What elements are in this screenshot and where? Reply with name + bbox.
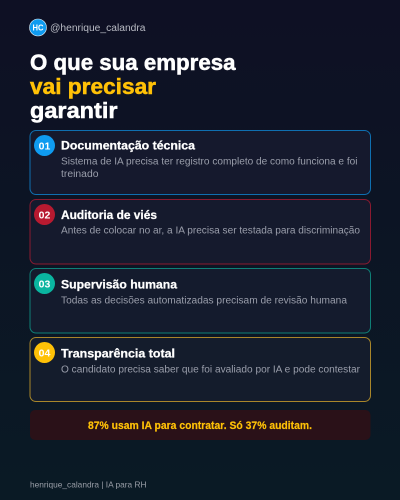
description: transparência total: O candidato precisa saber que foi avaliado por IA e pode contestar — [61, 364, 361, 376]
header: author handle — [30, 19, 146, 36]
heading: transparência total: Transparência total — [61, 347, 175, 361]
title: O que sua empresa — [30, 50, 236, 75]
description: documentação técnica — [61, 156, 358, 180]
footer: henrique_calandra | IA para RH — [30, 480, 146, 490]
panel: 03 supervisão humana — [30, 268, 370, 333]
description: supervisão humana: Todas as decisões automatizadas precisam de revisão humana — [61, 295, 348, 306]
callout: statistic banner — [30, 410, 370, 440]
badge 02: 02 — [39, 209, 50, 221]
badge 02 — [34, 204, 55, 225]
panel: 01 documentação técnica — [30, 130, 370, 194]
badge 01: 01 — [39, 140, 50, 152]
badge 01 — [34, 135, 55, 156]
badge 04 — [34, 342, 55, 363]
description: auditoria de viés: Antes de colocar no ar, a IA precisa ser testada para discriminação — [61, 226, 361, 236]
badge 04: 04 — [39, 347, 50, 359]
title: vai precisar — [30, 74, 156, 99]
heading: documentação técnica: Documentação técnica — [61, 139, 195, 153]
icon: avatar: HC — [32, 24, 44, 32]
heading: auditoria de viés: Auditoria de viés — [61, 208, 157, 222]
panel: 04 transparência total — [30, 338, 370, 402]
description: documentação técnica: Sistema de IA precisa ter registro completo de como funciona e foi — [61, 156, 358, 167]
title: garantir — [30, 98, 118, 123]
handle text: @henrique_calandra — [50, 23, 146, 34]
badge 03: 03 — [39, 278, 50, 290]
badge 03 — [34, 273, 55, 294]
title — [30, 50, 236, 123]
callout: statistic banner: 87% usam IA para contratar. Só 37% auditam. — [88, 420, 312, 432]
heading: supervisão humana: Supervisão humana — [61, 277, 177, 291]
panel: 02 auditoria de viés — [30, 200, 370, 264]
description: documentação técnica: treinado — [61, 169, 99, 180]
